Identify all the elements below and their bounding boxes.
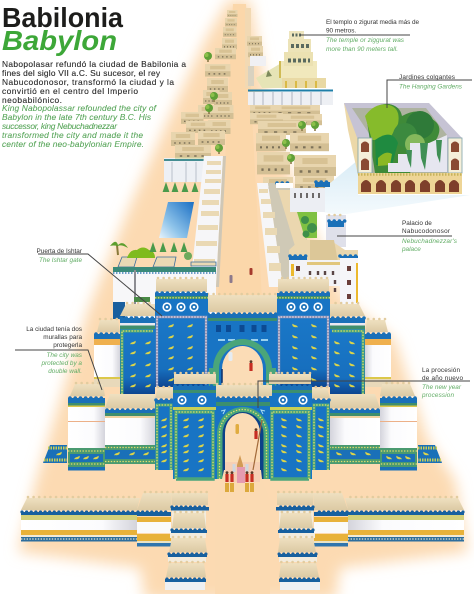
small blue roofs	[276, 182, 330, 188]
pale plinth	[225, 462, 260, 482]
callout: ziggurat: The temple or ziggurat was	[326, 37, 405, 44]
low white buildings behind wall	[113, 257, 216, 319]
cypress row	[163, 182, 198, 192]
callout: hanging gardens	[387, 74, 472, 108]
intro text Spanish: Nabucodonosor, transformó la ciudad y la	[2, 77, 174, 87]
palm tree	[110, 242, 128, 255]
callout: new year procession: procession	[421, 392, 454, 399]
callout: palace: palace	[401, 246, 421, 253]
callout: palace: Nebuchadnezzar's	[402, 238, 458, 245]
green bush	[127, 248, 155, 258]
callout: double wall: protected by a	[40, 360, 82, 367]
palace of Nebuchadnezzar	[289, 188, 358, 308]
callout: hanging gardens: Jardines colgantes	[399, 74, 455, 81]
pool	[159, 202, 194, 238]
callout: Ishtar gate: Puerta de Ishtar	[37, 248, 83, 255]
front gate centre wall	[216, 384, 272, 479]
callout: hanging gardens: The Hanging Gardens	[399, 84, 463, 90]
canal and colonnade	[248, 90, 333, 105]
road floor under arch	[215, 470, 270, 594]
callout: new year procession: La procesión	[422, 367, 460, 374]
front gate arch	[217, 407, 269, 479]
figures in back arch	[228, 352, 253, 371]
title: Babilonia: Babilonia	[2, 2, 124, 33]
road figures	[230, 268, 252, 283]
callout: double wall: protegerla	[53, 342, 82, 349]
callout: ziggurat: El templo o zigurat media más de	[326, 19, 419, 26]
right trees	[282, 121, 319, 164]
intro text English: center of the neo-babylonian Empire.	[2, 139, 144, 149]
intro text English: transformed the city and made it the	[2, 130, 143, 140]
callout: palace: Palacio de	[402, 220, 432, 227]
callout: double wall: murallas para	[43, 334, 82, 341]
intro text Spanish: fines del siglo VII a.C. Su sucesor, el rey	[2, 68, 161, 78]
intro text English: King Nabopolassar refounded the city of	[2, 103, 158, 113]
left half of gate and walls	[21, 278, 216, 590]
intro text Spanish: neobabilónico.	[2, 95, 62, 105]
intro text Spanish: convirtió en el centro del Imperio	[2, 86, 138, 96]
right garden pier	[448, 138, 462, 173]
left garden pier	[358, 138, 372, 173]
intro text Spanish: Nabopolasar refundó la ciudad de Babilonia a	[2, 59, 186, 69]
right half of gate and walls	[269, 278, 464, 590]
processional road	[218, 4, 262, 300]
white garden steps	[388, 135, 447, 172]
hanging gardens inset	[344, 103, 462, 194]
right white terrace	[257, 183, 310, 287]
callout: ziggurat: 90 metros.	[326, 28, 356, 34]
intro text English: Babylon in the late 7th century B.C. His	[2, 112, 152, 122]
back gate centre wall	[207, 294, 278, 387]
callout: palace: Nabucodonosor	[402, 228, 451, 235]
right city blocks	[245, 8, 336, 191]
callout: double wall: The city was	[46, 352, 83, 359]
callout: palace	[337, 220, 458, 253]
pale highlight beam	[300, 160, 470, 215]
intro text Spanish	[2, 59, 186, 105]
arcade base	[358, 173, 462, 194]
trees left	[204, 52, 223, 154]
cypress pair and shrub	[150, 242, 192, 260]
intro text English	[2, 103, 158, 149]
left white terrace	[190, 156, 226, 287]
callout: new year procession	[258, 367, 470, 408]
callout: Ishtar gate: The Ishtar gate	[39, 257, 82, 264]
callout: Ishtar gate	[37, 248, 162, 316]
callout: new year procession: de año nuevo	[422, 375, 463, 382]
procession of figures	[225, 420, 262, 492]
city blocks left	[171, 10, 238, 159]
hanging vines	[406, 140, 442, 170]
callout: ziggurat	[300, 19, 419, 53]
garden foliage	[365, 104, 439, 173]
title: Babylon: Babylon	[2, 25, 117, 56]
canal and columns left	[164, 158, 205, 182]
back gate arch	[209, 339, 276, 387]
callout: double wall: La ciudad tenía dos	[26, 326, 82, 333]
callout: new year procession: The new year	[422, 384, 462, 391]
callout: ziggurat: more than 90 meters tall.	[326, 46, 398, 53]
callout: double wall	[15, 326, 102, 390]
ziggurat	[256, 31, 326, 88]
callout: double wall: double wall.	[48, 368, 82, 375]
intro text English: successor, king Nebuchadnezzar	[2, 121, 118, 131]
